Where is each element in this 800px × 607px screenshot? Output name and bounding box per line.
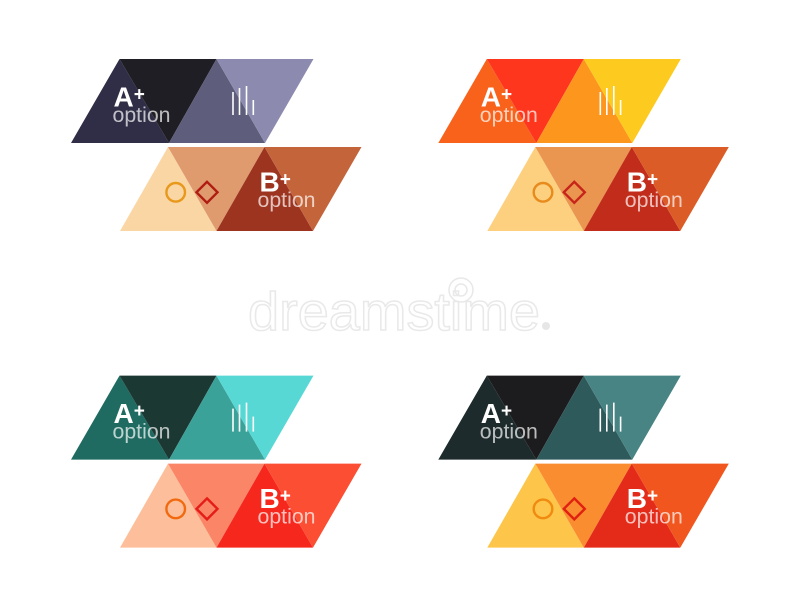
label: A+: + xyxy=(134,84,145,106)
label: A+: A xyxy=(114,82,134,112)
label: B+: B xyxy=(260,166,280,198)
label: option: option xyxy=(112,104,170,127)
option A banner xyxy=(438,376,681,460)
option B banner xyxy=(120,147,362,231)
label: B+: B xyxy=(260,483,280,514)
label: option: option xyxy=(258,189,316,212)
label: B+: B xyxy=(627,483,647,514)
option A banner xyxy=(71,59,314,143)
option A banner xyxy=(438,59,681,143)
option B banner xyxy=(487,147,729,231)
icon: bars xyxy=(600,403,621,432)
icon: diamond xyxy=(196,498,218,519)
label: B+: + xyxy=(280,486,291,507)
label: option: option xyxy=(480,421,538,444)
label: option: option xyxy=(480,104,538,127)
label: option: option xyxy=(258,506,316,529)
label: option: option xyxy=(112,421,170,444)
label: A+: + xyxy=(134,401,145,422)
icon: diamond xyxy=(196,182,218,203)
panel: top-left option set xyxy=(71,59,362,231)
icon: circle xyxy=(166,183,185,202)
icon: circle xyxy=(534,183,552,202)
panel: bottom-right option set xyxy=(438,376,729,548)
label: A+: A xyxy=(481,398,501,429)
label: A+: + xyxy=(501,84,512,106)
panel: bottom-left option set xyxy=(71,376,362,548)
icon: diamond xyxy=(564,498,585,519)
icon: circle xyxy=(534,500,552,518)
label: B+: + xyxy=(647,170,658,190)
icon: bars xyxy=(233,86,253,115)
watermark: dreamstime xyxy=(248,282,540,342)
icon: circle xyxy=(166,500,185,518)
label: B+: B xyxy=(627,166,647,198)
option B banner xyxy=(487,464,729,548)
label: B+: + xyxy=(280,170,291,190)
label: B+: + xyxy=(647,486,658,507)
icon: bars xyxy=(600,86,621,115)
option B banner xyxy=(120,464,362,548)
label: option: option xyxy=(625,506,683,529)
label: A+: + xyxy=(501,401,512,422)
icon: diamond xyxy=(564,182,585,203)
panel: top-right option set xyxy=(438,59,729,231)
label: A+: A xyxy=(481,82,501,112)
label: A+: A xyxy=(114,398,134,429)
label: option: option xyxy=(625,189,683,212)
option A banner xyxy=(71,376,314,460)
icon: bars xyxy=(233,403,253,432)
